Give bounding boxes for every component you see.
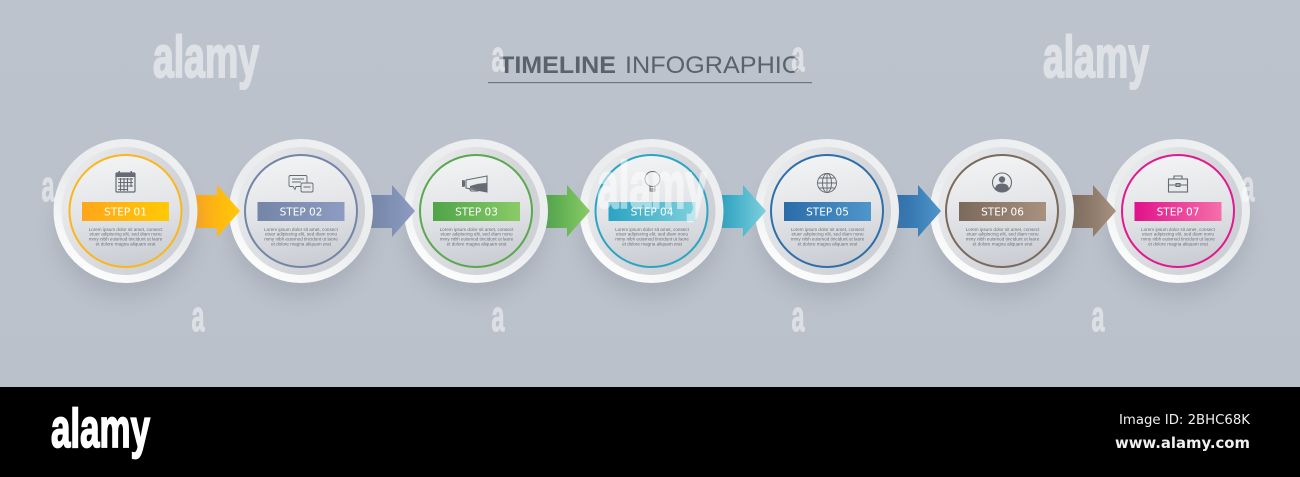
step 01 body text: et dolore magna aliquam erat <box>96 241 156 246</box>
step 01 body text: etuer adipiscing elit, sed diam nonu <box>89 232 162 237</box>
step 03 label bar <box>433 202 520 221</box>
alamy logo: alamy <box>51 397 150 459</box>
step 01 label bar <box>82 202 169 221</box>
step 01 body text: mmy nibh euismod tincidunt ut laore <box>89 236 163 241</box>
watermarks <box>42 25 1255 341</box>
step 07 body text <box>1141 227 1216 246</box>
step 04 circle <box>580 139 724 296</box>
icon: globe <box>818 174 836 192</box>
step 06 label bar: STEP 06 <box>981 206 1024 218</box>
step 05 body text: etuer adipiscing elit, sed diam nonu <box>791 232 864 237</box>
step 04 body text: etuer adipiscing elit, sed diam nonu <box>616 232 688 237</box>
image id: Image ID: 2BHC68K <box>1119 412 1251 428</box>
step 07 label bar <box>1134 202 1222 221</box>
step 07 circle <box>1106 139 1250 296</box>
watermarks: alamy <box>597 148 707 222</box>
arrow 5 to 6 <box>897 185 941 237</box>
step 05 body text <box>791 227 865 246</box>
step 02 body text: et dolore magna aliquam erat <box>271 241 332 246</box>
watermarks: a <box>42 162 55 211</box>
watermarks: a <box>492 292 505 341</box>
arrow 4 to 5 <box>722 185 766 237</box>
step 07 body text: Lorem ipsum dolor sit amet, consect <box>1141 227 1216 232</box>
step 02 body text: mmy nibh euismod tincidunt ut laore <box>264 236 338 241</box>
icon: briefcase <box>1168 176 1188 192</box>
step 05 circle <box>755 139 899 296</box>
step 05 body text: et dolore magna aliquam erat <box>798 241 858 246</box>
step 07 body text: mmy nibh euismod tincidunt ut laore <box>1141 236 1215 241</box>
watermarks: a <box>192 292 205 341</box>
title: TIMELINE <box>499 52 616 79</box>
step 03 label bar: STEP 03 <box>455 206 498 218</box>
watermarks: a <box>492 32 505 81</box>
step 03 body text: et dolore magna aliquam erat <box>447 241 507 246</box>
step 05 body text: Lorem ipsum dolor sit amet, consect <box>791 227 865 232</box>
step 03 body text: Lorem ipsum dolor sit amet, consect <box>440 227 514 232</box>
arrow 1 to 2 <box>196 185 240 237</box>
step 02 label bar <box>258 202 344 221</box>
step 04 body text: mmy nibh euismod tincidunt ut laore <box>615 236 689 241</box>
arrow 2 to 3 <box>371 185 415 237</box>
step 06 body text: et dolore magna aliquam erat <box>973 241 1033 246</box>
step 04 label bar: STEP 04 <box>631 206 674 218</box>
step 01 circle <box>54 139 198 296</box>
step 03 circle <box>404 139 548 296</box>
step 02 circle <box>229 139 373 296</box>
step 05 label bar <box>784 202 871 221</box>
step 03 body text <box>440 227 514 246</box>
step 06 body text <box>966 227 1040 246</box>
step 01 body text <box>89 227 163 246</box>
step 06 body text: Lorem ipsum dolor sit amet, consect <box>966 227 1040 232</box>
step 02 label bar: STEP 02 <box>280 206 322 218</box>
step 07 body text: etuer adipiscing elit, sed diam nonu <box>1142 232 1214 237</box>
step 06 label bar <box>959 202 1046 221</box>
step 04 body text: Lorem ipsum dolor sit amet, consect <box>615 227 690 232</box>
website: www.alamy.com <box>1115 434 1250 452</box>
step 02 body text: Lorem ipsum dolor sit amet, consect <box>264 227 339 232</box>
icon: calendar <box>116 171 135 192</box>
arrow 6 to 7 <box>1072 185 1116 237</box>
step 05 body text: mmy nibh euismod tincidunt ut laore <box>791 236 865 241</box>
watermarks: a <box>1242 162 1255 211</box>
step 02 body text: etuer adipiscing elit, sed diam nonu <box>265 232 337 237</box>
black footer band <box>0 387 1300 477</box>
step 06 body text: etuer adipiscing elit, sed diam nonu <box>966 232 1039 237</box>
watermarks: a <box>792 292 805 341</box>
watermarks: alamy <box>1043 25 1149 90</box>
step 07 label bar: STEP 07 <box>1157 206 1199 218</box>
icon: light bulb <box>645 172 660 191</box>
title: INFOGRAPHIC <box>625 52 800 79</box>
icon: chat bubbles <box>289 176 313 192</box>
watermarks: a <box>792 32 805 81</box>
step 04 body text: et dolore magna aliquam erat <box>622 241 683 246</box>
icon: megaphone <box>462 176 487 192</box>
step 01 body text: Lorem ipsum dolor sit amet, consect <box>89 227 163 232</box>
step 02 body text <box>264 227 339 246</box>
watermarks: alamy <box>153 25 259 90</box>
step 07 body text: et dolore magna aliquam erat <box>1148 241 1209 246</box>
step 06 body text: mmy nibh euismod tincidunt ut laore <box>966 236 1040 241</box>
arrow 3 to 4 <box>546 185 590 237</box>
step 03 body text: etuer adipiscing elit, sed diam nonu <box>440 232 513 237</box>
step 05 label bar: STEP 05 <box>806 206 849 218</box>
step 04 body text <box>615 227 690 246</box>
step 04 label bar <box>608 202 696 221</box>
title <box>488 52 812 83</box>
step 01 label bar: STEP 01 <box>104 206 147 218</box>
step 03 body text: mmy nibh euismod tincidunt ut laore <box>440 236 514 241</box>
step 06 circle <box>930 139 1074 296</box>
icon: person <box>992 173 1012 192</box>
watermarks: a <box>1092 292 1105 341</box>
